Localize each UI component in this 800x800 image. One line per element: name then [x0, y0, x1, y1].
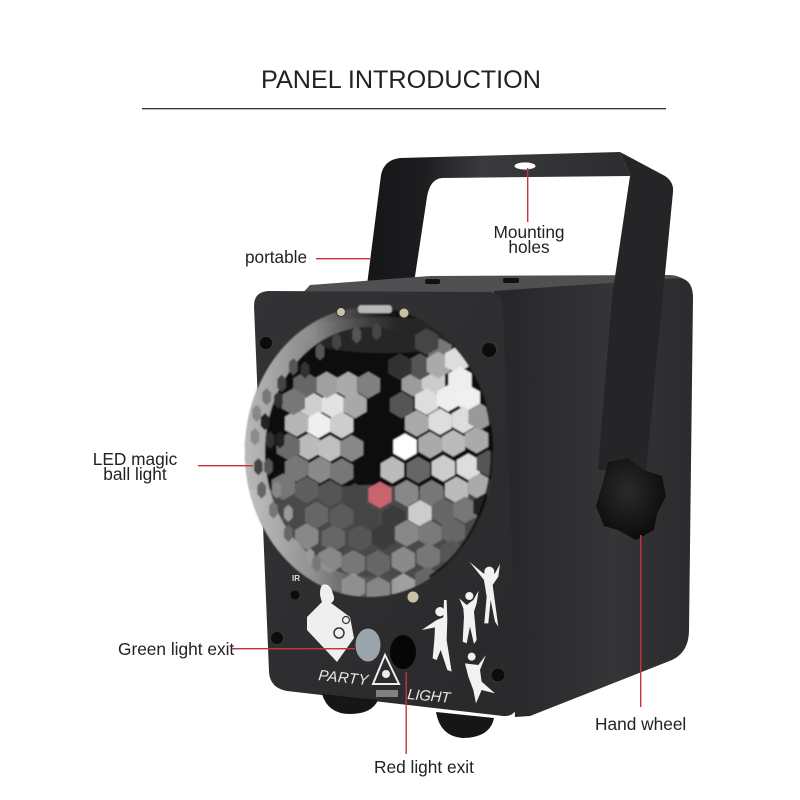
bracket: right arm	[598, 152, 673, 470]
icon: IR sensor: IR	[292, 574, 300, 583]
callout: mounting holes: Mounting	[493, 222, 565, 242]
feet	[322, 694, 494, 738]
bracket: carrying handle	[367, 152, 630, 285]
screws: top of case	[425, 278, 519, 284]
callout: LED magic ball light: LED magic	[93, 449, 178, 469]
panel: side of case	[494, 278, 693, 717]
party text: PARTY	[318, 667, 370, 689]
silver screws	[336, 308, 419, 603]
red light exit lens	[390, 635, 416, 669]
panel: top of case	[300, 275, 693, 300]
callout: red light exit	[374, 672, 474, 777]
light text: LIGHT	[407, 686, 453, 707]
callout: LED magic ball light: ball light	[103, 464, 167, 484]
callout: mounting holes	[493, 168, 565, 257]
magic ball light	[244, 304, 494, 598]
callout: green light exit: Green light exit	[118, 639, 234, 659]
icon: IR sensor	[290, 574, 300, 600]
icon: DJ silhouette	[307, 584, 354, 662]
callout: red light exit: Red light exit	[374, 757, 474, 777]
icon: laser warning	[373, 655, 399, 697]
facets	[272, 328, 500, 603]
ball rim glass	[244, 307, 398, 597]
title: PANEL INTRODUCTION	[261, 66, 541, 94]
callout: hand wheel: Hand wheel	[595, 714, 686, 734]
screws	[260, 336, 505, 682]
callout: LED magic ball light	[93, 449, 253, 484]
hand wheel knob	[596, 458, 666, 540]
icon: dancers	[422, 562, 500, 703]
ball top window	[358, 305, 392, 313]
panel: front of case	[254, 291, 517, 716]
callout: portable: portable	[245, 247, 307, 267]
icon: mounting hole	[514, 162, 536, 170]
green light exit lens	[356, 628, 380, 662]
product: party light	[240, 152, 693, 738]
callout: portable	[245, 247, 370, 267]
callout: mounting holes: holes	[508, 237, 550, 257]
